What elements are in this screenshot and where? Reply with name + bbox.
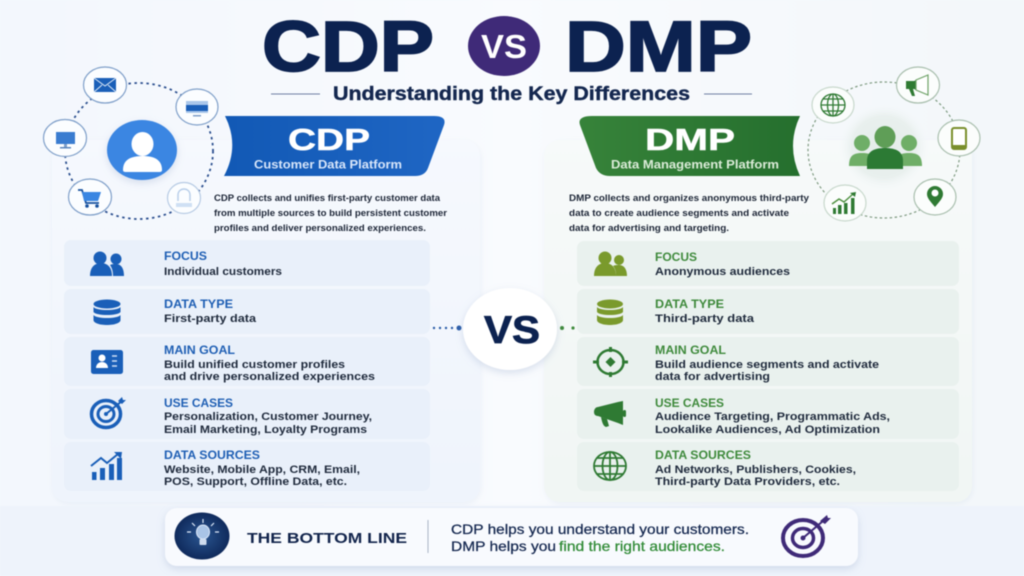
icon: screen node [176,89,218,125]
icon: phone node [938,120,980,156]
CDP row: data sources: POS, Support, Offline Data, etc. [164,476,347,488]
DMP row: use cases: Lookalike Audiences, Ad Optimization [655,424,880,436]
icon: globe node [812,87,854,123]
icon: megaphone node [896,67,940,103]
takeaway text: DMP helps you [451,538,556,554]
VS circle [463,288,557,370]
CDP row: focus: FOCUS [164,251,207,263]
icon: database [94,300,120,325]
DMP ribbon [580,116,800,176]
badge: VS: VS [481,28,527,65]
DMP row: data type: DATA TYPE [655,299,724,311]
DMP row: data sources: Ad Networks, Publishers, Cookies, [655,464,856,476]
DMP row: use cases: Audience Targeting, Programmatic Ads, [655,411,890,423]
CDP description [214,193,447,234]
CDP description: CDP collects and unifies first-party customer data [214,193,441,204]
panel background [544,140,972,502]
panel: CDP [52,140,480,502]
CDP ribbon: CDP [288,122,370,157]
DMP description [569,193,810,234]
CDP row: main goal: MAIN GOAL [164,345,235,357]
CDP row: data type: First-party data [164,313,257,325]
icon: growth chart [91,452,122,480]
CDP row: data type: DATA TYPE [164,299,233,311]
DMP row: main goal: MAIN GOAL [655,345,726,357]
icon: lightbulb [174,512,230,560]
VS circle: VS [484,309,540,352]
CDP row: main goal [64,337,430,386]
icon: profile card [91,350,123,374]
DMP row: use cases: USE CASES [655,398,724,410]
DMP description: data for advertising and targeting. [569,223,729,234]
takeaway text [451,521,749,554]
icon: target [783,515,831,556]
bottom line card [165,508,858,566]
icon: crosshair [593,347,628,377]
DMP row: focus: Anonymous audiences [655,266,790,278]
DMP row: data type: Third-party data [655,313,755,325]
left connector dots [433,326,462,330]
bottom band [0,506,1024,576]
badge: VS [468,16,540,76]
DMP row: data sources: DATA SOURCES [655,450,751,462]
takeaway text: CDP helps you understand your customers. [451,521,749,537]
CDP row: main goal: and drive personalized experiences [164,371,375,383]
title [262,8,752,87]
icon: support node [168,182,200,214]
CDP row: data sources: DATA SOURCES [164,450,260,462]
DMP row: use cases [577,389,959,439]
icon: globe [594,452,626,480]
icon: megaphone [594,401,626,427]
CDP row: main goal: Build unified customer profiles [164,359,345,371]
DMP orbit graphic [808,67,980,221]
CDP row: use cases: Personalization, Customer Journey, [164,411,372,423]
icon: cart node [68,179,112,215]
CDP description: profiles and deliver personalized experiences. [214,223,426,234]
icon: people [594,252,627,276]
takeaway text: find the right audiences. [559,538,725,554]
DMP row: main goal: Build audience segments and activate [655,359,879,371]
title: CDP: CDP [262,8,434,87]
icon: chart node [824,185,866,221]
CDP ribbon: Customer Data Platform [254,160,402,172]
icon: people [90,252,124,276]
DMP row: data sources [577,442,959,491]
subtitle: Understanding the Key Differences [333,84,690,105]
icon: desktop node [44,120,86,156]
title: DMP: DMP [565,8,752,87]
icon: database [597,300,623,325]
icon: location pin node [914,179,956,215]
DMP row: focus: FOCUS [655,252,697,264]
icon: email node [84,67,126,103]
VS connector [433,288,575,370]
bottom line card: THE BOTTOM LINE [247,530,407,547]
DMP description: data to create audience segments and activate [569,208,789,219]
DMP row: main goal [577,337,959,386]
CDP row: focus: Individual customers [164,266,282,278]
DMP ribbon: DMP [645,122,735,157]
DMP description: DMP collects and organizes anonymous third-party [569,193,810,204]
DMP row: data sources: Third-party Data Providers, etc. [655,476,840,488]
CDP row: use cases: Email Marketing, Loyalty Programs [164,424,367,436]
CDP orbit graphic [44,67,218,219]
right connector dots [560,326,575,330]
panel background [52,140,480,502]
icon: target [92,397,126,428]
DMP ribbon: Data Management Platform [611,160,779,172]
icon: audience group [838,103,930,191]
CDP row: data sources: Website, Mobile App, CRM, Email, [164,464,360,476]
CDP row: data type [64,289,430,334]
DMP row: main goal: data for advertising [655,371,770,383]
CDP description: from multiple sources to build persistent customer [214,208,447,219]
CDP ribbon [224,116,445,176]
panel: DMP [544,140,972,502]
DMP row: focus [577,241,959,286]
CDP row: data sources [64,442,430,491]
icon: customer avatar [107,120,177,180]
CDP row: use cases [64,389,430,439]
DMP row: data type [577,289,959,334]
CDP row: use cases: USE CASES [164,398,233,410]
CDP row: focus [64,240,430,286]
